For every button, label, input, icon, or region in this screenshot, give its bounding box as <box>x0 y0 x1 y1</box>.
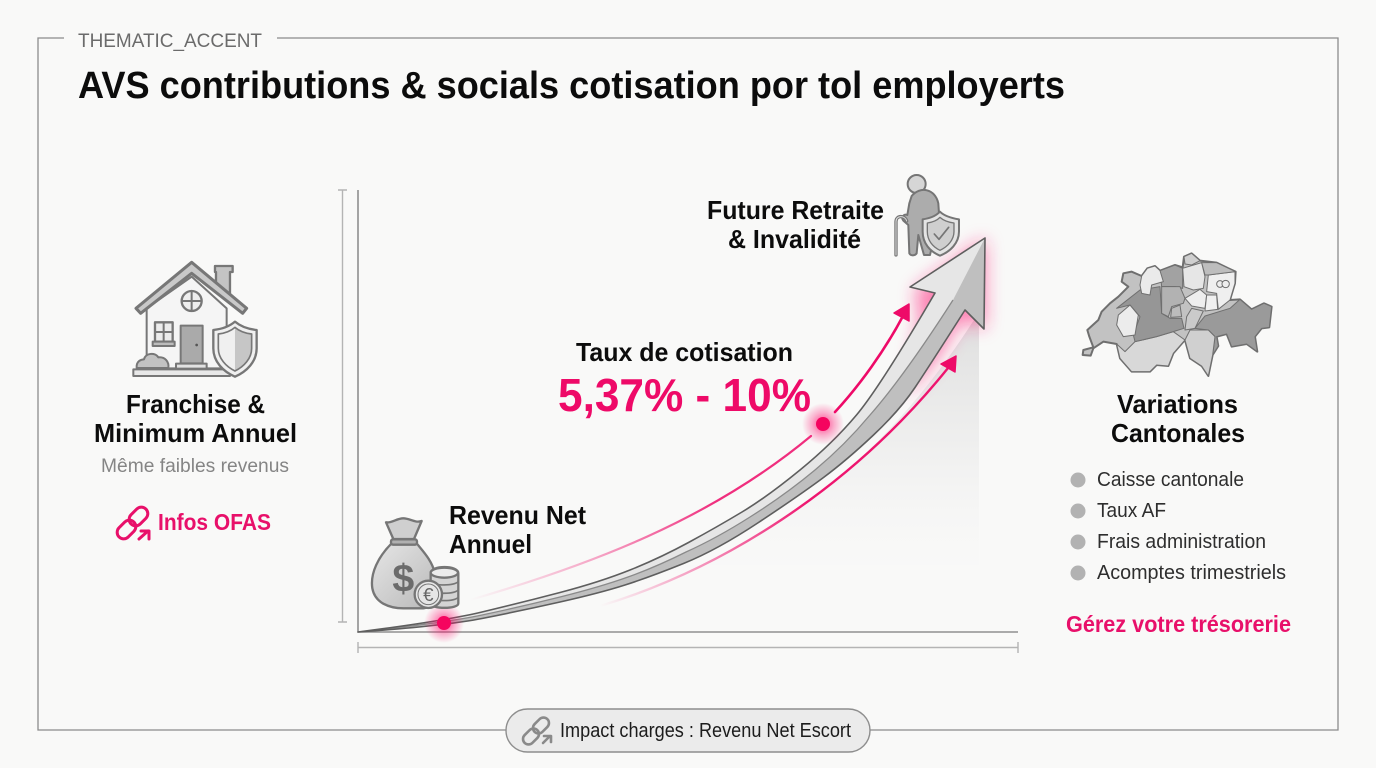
footer pill: Impact charges : Revenu Net Escort <box>560 720 851 742</box>
arrow body light side <box>358 238 985 632</box>
chart: contribution growth curve <box>338 175 1018 653</box>
data point: rate <box>802 403 844 445</box>
list: cantonal items: Frais administration <box>1097 531 1266 553</box>
label: taux de cotisation: Taux de cotisation <box>576 337 793 367</box>
pink trend line upper <box>470 304 909 600</box>
axes <box>338 190 1018 653</box>
arrow centre line <box>358 300 953 632</box>
icon: money bag and coins <box>372 518 458 608</box>
arrow outline <box>358 238 985 632</box>
footer pill <box>506 709 870 752</box>
panel: franchise and minimum <box>94 262 297 542</box>
area under curve <box>640 312 979 590</box>
list: cantonal items: Taux AF <box>1097 500 1166 522</box>
main arrow <box>358 238 985 632</box>
label: taux de cotisation <box>558 337 811 421</box>
icon: money bag and coins: $ <box>392 557 414 601</box>
title: AVS contributions & socials cotisation por tol employerts <box>78 65 1065 107</box>
heading: franchise <box>94 389 297 448</box>
icon: elderly person with shield <box>896 175 959 256</box>
icon: map of Switzerland <box>1083 253 1272 376</box>
label: future retraite: & Invalidité <box>728 224 861 254</box>
icon: house with shield <box>133 262 257 377</box>
call to action: Gérez votre trésorerie <box>1066 611 1291 637</box>
subtitle: Même faibles revenus <box>101 456 289 477</box>
link: infos OFAS: Infos OFAS <box>158 509 271 535</box>
heading: variations cantonales <box>1111 389 1245 448</box>
link: infos OFAS <box>114 504 271 542</box>
icon: pink link <box>114 504 151 542</box>
heading: franchise: Franchise & <box>126 389 265 419</box>
label: revenu net annuel: Revenu Net <box>449 500 586 530</box>
panel: cantonal variations <box>1066 253 1291 637</box>
icon: money bag and coins: € <box>423 584 434 605</box>
eyebrow label: THEMATIC_ACCENT <box>78 31 262 52</box>
list: cantonal items <box>1070 469 1286 584</box>
heading: variations cantonales: Variations <box>1117 389 1238 419</box>
arrow glow <box>905 238 985 395</box>
arrow body dark side <box>358 238 985 632</box>
label: taux de cotisation: 5,37% - 10% <box>558 369 811 421</box>
label: future retraite <box>707 195 884 254</box>
heading: franchise: Minimum Annuel <box>94 418 297 448</box>
data point: start <box>424 603 464 643</box>
heading: variations cantonales: Cantonales <box>1111 418 1245 448</box>
label: future retraite: Future Retraite <box>707 195 884 225</box>
list: cantonal items: Caisse cantonale <box>1097 469 1244 491</box>
list: cantonal items: Acomptes trimestriels <box>1097 562 1286 584</box>
pink trend line lower <box>600 356 956 606</box>
icon: grey link <box>521 715 551 747</box>
label: revenu net annuel: Annuel <box>449 529 532 559</box>
label: revenu net annuel <box>449 500 586 559</box>
